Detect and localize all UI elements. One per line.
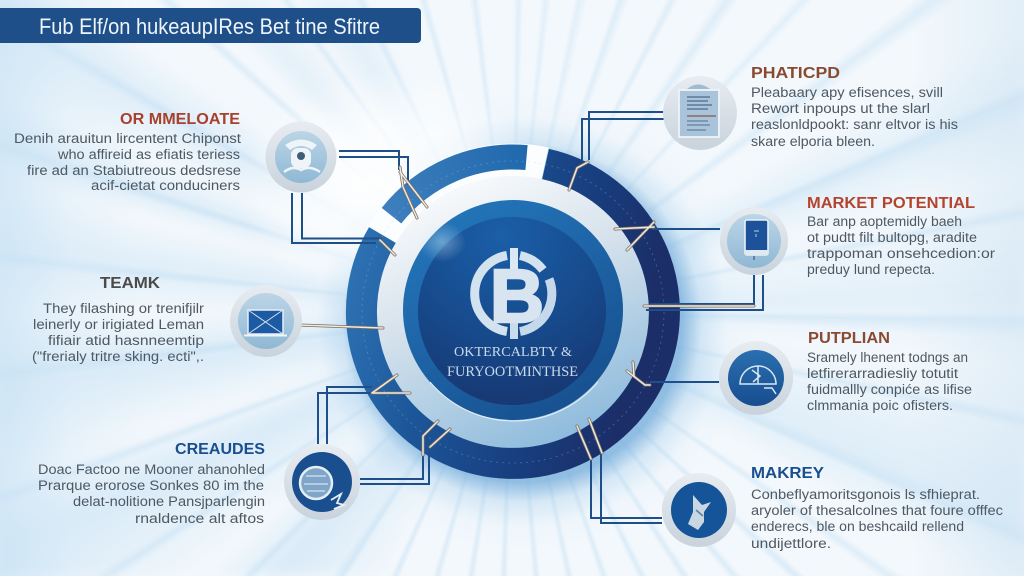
dashed stitching: [362, 161, 664, 463]
connector lines: [292, 112, 763, 523]
body: skare elporia bleen.: [751, 134, 875, 149]
body: rnaldence alt aftos: [135, 511, 264, 526]
body: Bar anp aoptemidly baeh: [807, 214, 962, 229]
heading: TEAMK: [100, 275, 160, 292]
body: Sramely lhenent todngs an: [807, 350, 968, 365]
pale ring: [377, 176, 649, 448]
body: trappoman onsehcedion:or: [807, 246, 996, 261]
heading: OR MMELOATE: [120, 111, 240, 128]
body: [807, 350, 972, 413]
hub caption: FURYOOTMINTHSE: [447, 364, 578, 380]
body: Rewort inpoups ut the slarl: [751, 101, 930, 116]
block: phaticpd: [751, 65, 958, 149]
body: [38, 462, 265, 526]
body: letfirerarradiesliy totutit: [807, 366, 958, 381]
bitcoin style logo: [475, 248, 552, 339]
block: team: [32, 275, 205, 364]
body: ("frerialy tritre sking. ecti",.: [32, 349, 204, 364]
body: [751, 487, 1003, 551]
block: putplian: [807, 330, 972, 413]
body: Doac Factoo ne Mooner ahanohled: [38, 462, 265, 477]
bottom ring highlight: [430, 382, 598, 421]
body: Prarque erorose Sonkes 80 im the: [38, 478, 264, 493]
heading: PUTPLIAN: [808, 330, 890, 347]
icon: envelope badge: [230, 285, 302, 357]
heading: MAKREY: [751, 465, 824, 482]
wire ends: [299, 162, 754, 459]
title banner: Fub Elf/on hukeaupIRes Bet tine Sfitre: [39, 14, 380, 39]
body: undijettlore.: [751, 536, 831, 551]
body: leinerly or irigiated Leman: [33, 317, 204, 332]
outer navy arc: [361, 164, 664, 463]
body: fire ad an Stabiutreous dedsrese: [27, 163, 241, 178]
body: clmmania poic ofisters.: [807, 398, 953, 413]
icon: dome search badge: [719, 341, 793, 415]
body: Denih arauitun lircentent Chiponst: [14, 131, 241, 146]
icon: figure badge: [662, 473, 736, 547]
body: acif-cietat conduciners: [91, 178, 240, 193]
body: who affireid as efiatis teriess: [57, 147, 240, 162]
body: Pleabaary apy efisences, svill: [751, 85, 943, 100]
body: [807, 214, 996, 277]
body: Conbeflyamoritsgonois ls sfhieprat.: [751, 487, 980, 502]
block: creaudes: [38, 441, 265, 526]
body: ot pudtt filt bultopg, aradite: [807, 230, 977, 245]
glare: [418, 222, 466, 262]
body: preduy lund repecta.: [807, 262, 935, 277]
heading: CREAUDES: [175, 441, 265, 458]
body: They filashing or trenifjilr: [43, 301, 205, 316]
icon: document badge: [663, 76, 737, 150]
body: fifiair atid hasnneemtip: [48, 333, 204, 348]
title banner: [0, 8, 421, 43]
block: upper left: [14, 111, 241, 193]
dark core: [418, 217, 606, 405]
body: [14, 131, 241, 193]
heading: PHATICPD: [751, 65, 840, 82]
icon: globe badge: [284, 444, 360, 520]
body: aryoler of thesalcolnes that foure offfec: [751, 503, 1003, 518]
hub caption: OKTERCALBTY &: [454, 345, 572, 360]
body: reaslonldpookt: sanr eltvor is his: [751, 117, 958, 132]
white backing arc in the upper left: [380, 161, 545, 240]
central hub: [361, 157, 664, 463]
block: market potential: [807, 195, 996, 277]
icon: tablet badge: [720, 207, 788, 275]
icon: telephone badge: [266, 122, 336, 192]
block: makrey: [751, 465, 1003, 551]
body: enderecs, ble on beshcaild rellend: [751, 519, 964, 534]
body: fuidmallly conpiće as lifise: [807, 382, 972, 397]
heading: MARKET POTENTIAL: [807, 195, 975, 212]
bitcoin style logo: B: [490, 254, 544, 338]
body: [32, 301, 205, 364]
upper left blue arc segment: [392, 157, 526, 216]
body: delat-nolitione Pansjparlengin: [73, 494, 265, 509]
hub caption: [447, 345, 578, 380]
body: [751, 85, 958, 149]
blue inner ring: [403, 200, 623, 420]
